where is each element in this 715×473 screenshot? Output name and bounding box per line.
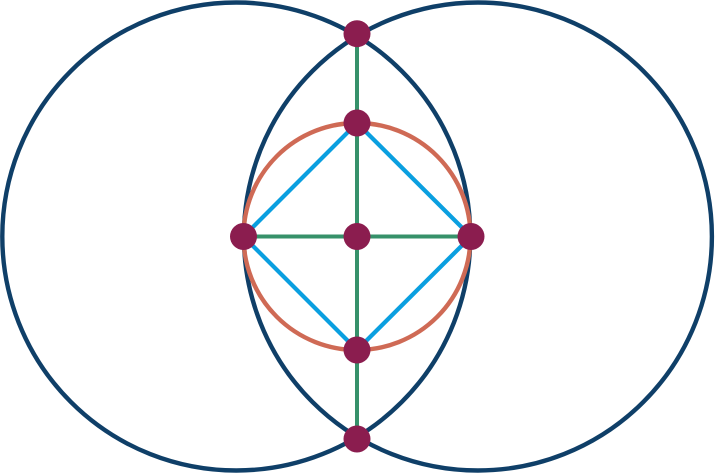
green vertical and horizontal axes (244, 34, 471, 439)
blue diamond (244, 123, 471, 350)
orange inner circle (244, 123, 470, 350)
maroon nodes (230, 20, 484, 452)
